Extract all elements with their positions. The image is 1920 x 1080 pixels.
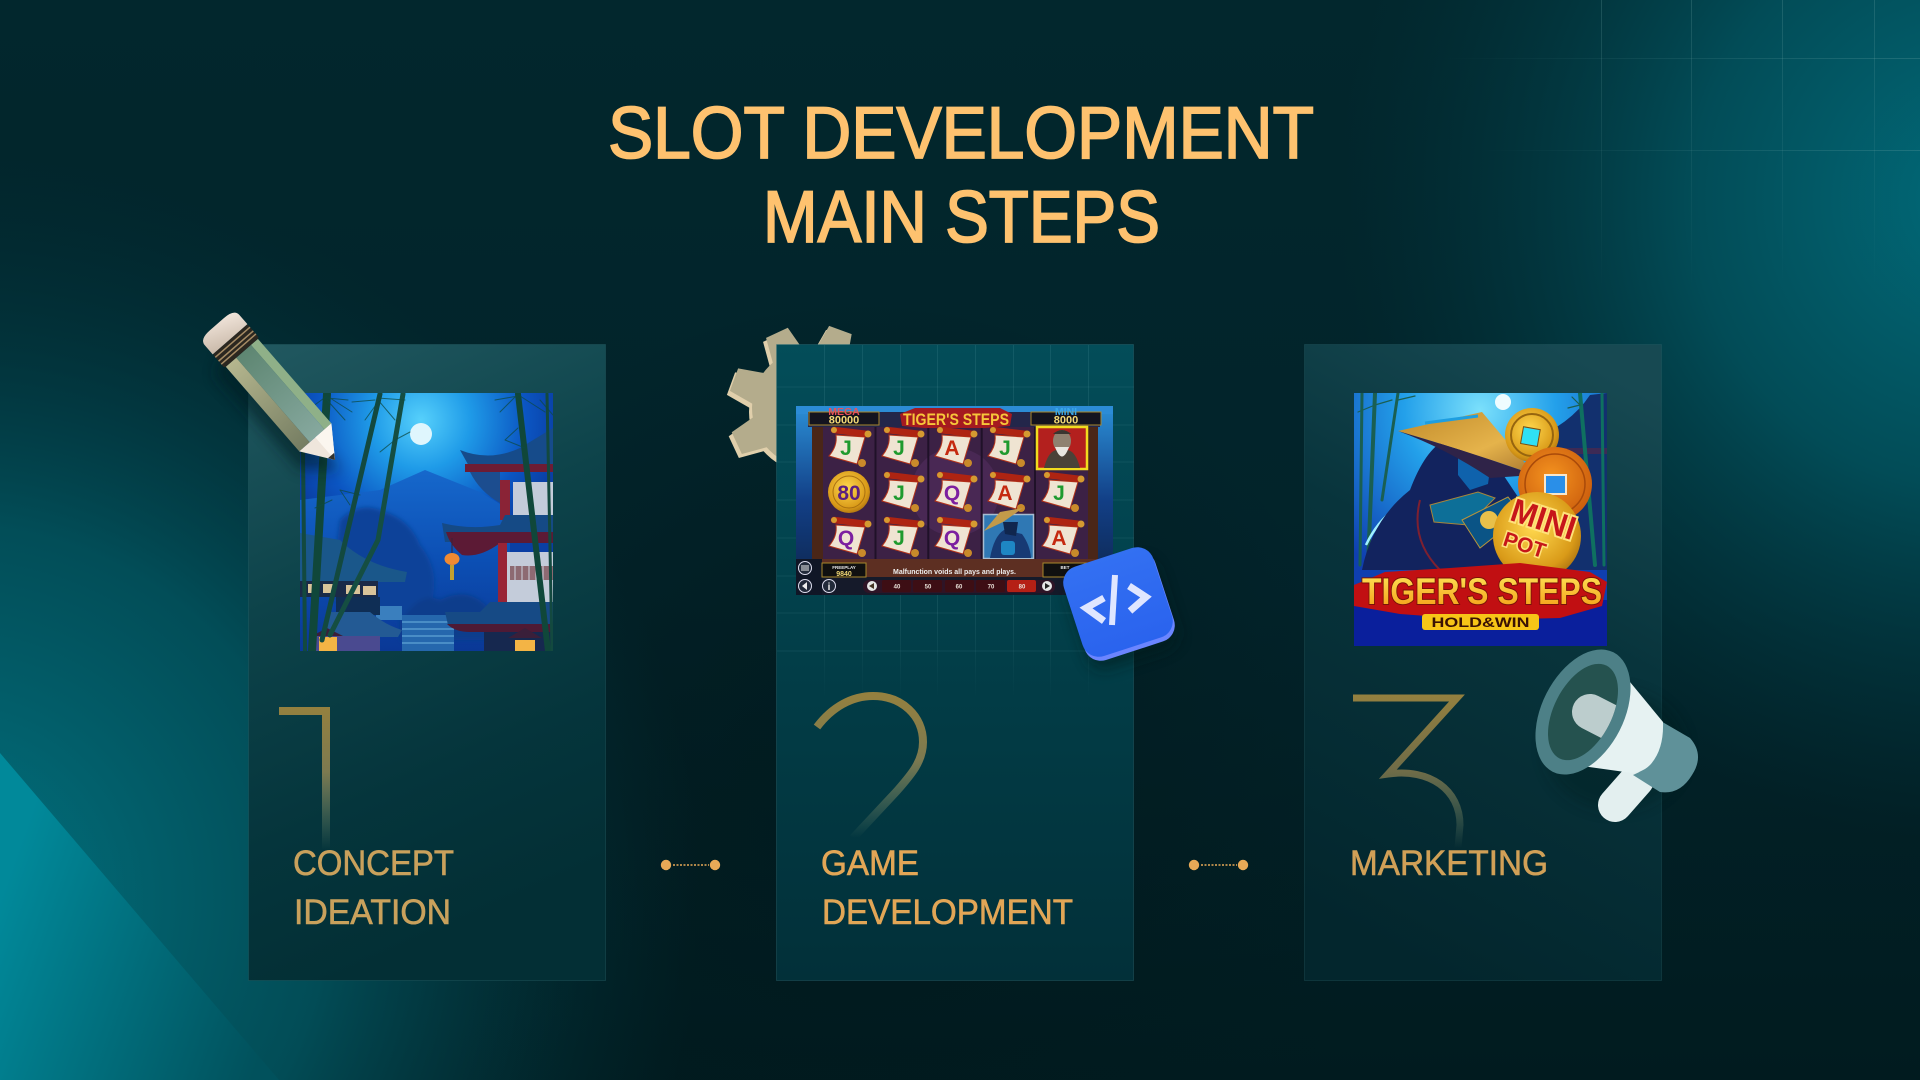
lantern	[444, 538, 460, 580]
logo banner: TIGER'S STEPS	[1362, 571, 1602, 612]
title: SLOT DEVELOPMENT	[608, 93, 1314, 174]
header bar: MEGA	[828, 406, 860, 418]
number 2	[817, 696, 923, 838]
illustration: moonlit pagoda scene	[300, 393, 553, 651]
bamboo	[303, 394, 553, 651]
label: concept ideation: IDEATION	[294, 893, 451, 932]
coin symbol	[828, 471, 870, 513]
label: concept ideation: CONCEPT	[293, 844, 454, 883]
title: MAIN STEPS	[763, 177, 1160, 258]
reel symbols: Q	[944, 527, 960, 550]
reel symbols: J	[893, 437, 905, 460]
number 1	[279, 711, 326, 850]
coins: POT	[1500, 528, 1549, 563]
ninja symbol	[984, 508, 1034, 558]
portrait symbol	[1037, 427, 1087, 469]
number 3	[1353, 698, 1460, 848]
control bar: i	[828, 582, 831, 593]
control bar: 50	[925, 584, 932, 590]
label: game development: GAME	[821, 844, 919, 883]
control bar: FREEPLAY	[832, 565, 856, 570]
panel: concept ideation	[248, 344, 606, 980]
reel symbols	[829, 427, 1084, 557]
ninja	[1362, 440, 1522, 570]
control bar: 70	[988, 584, 995, 590]
coin symbol: 80	[837, 482, 861, 505]
title	[608, 93, 1314, 258]
control bar: 40	[894, 584, 901, 590]
illustration: game screen	[796, 406, 1113, 595]
lightning	[1364, 514, 1386, 546]
header bar: 80000	[829, 414, 859, 426]
reel symbols: J	[893, 527, 905, 550]
reel symbols: Q	[838, 527, 854, 550]
icon: code badge	[1059, 543, 1182, 674]
connector: step 1 to 2	[661, 860, 720, 870]
reel symbols: Q	[944, 482, 960, 505]
icon: megaphone	[1536, 650, 1698, 822]
icon: pencil	[200, 309, 352, 475]
header bar: 8000	[1054, 414, 1078, 426]
label: game development: DEVELOPMENT	[822, 893, 1073, 932]
illustration: ninja key art	[1354, 393, 1607, 646]
header bar	[808, 408, 1102, 428]
label: marketing: MARKETING	[1350, 844, 1548, 883]
header bar: TIGER'S STEPS	[903, 410, 1009, 429]
bamboo	[1358, 393, 1604, 565]
reel symbols: A	[1051, 527, 1067, 550]
header bar: MINI	[1055, 406, 1077, 418]
panel: game development	[776, 344, 1134, 980]
control bar: Malfunction voids all pays and plays.	[893, 567, 1016, 576]
label: game development	[821, 844, 1073, 932]
reel symbols: J	[840, 437, 852, 460]
label: concept ideation	[293, 844, 454, 932]
connector: step 2 to 3	[1189, 860, 1248, 870]
coins: MINI	[1506, 491, 1581, 547]
control bar	[796, 559, 1113, 595]
control bar: 9840	[836, 571, 852, 578]
right pagoda	[442, 428, 553, 651]
stairs	[376, 606, 454, 651]
control bar: BET	[1060, 565, 1070, 570]
reel symbols: J	[1053, 482, 1065, 505]
panel: marketing	[1304, 344, 1662, 980]
icon: gear	[725, 324, 872, 472]
left house	[300, 533, 407, 651]
logo banner: HOLD&WIN	[1432, 614, 1530, 630]
reel symbols: A	[944, 437, 960, 460]
reel symbols: A	[997, 482, 1013, 505]
reel symbols: J	[999, 437, 1011, 460]
control bar: 80	[1019, 584, 1026, 590]
hat	[1398, 412, 1535, 478]
reel symbols: J	[893, 482, 905, 505]
coins	[1493, 408, 1592, 580]
control bar: 60	[956, 584, 963, 590]
logo banner	[1354, 563, 1607, 646]
